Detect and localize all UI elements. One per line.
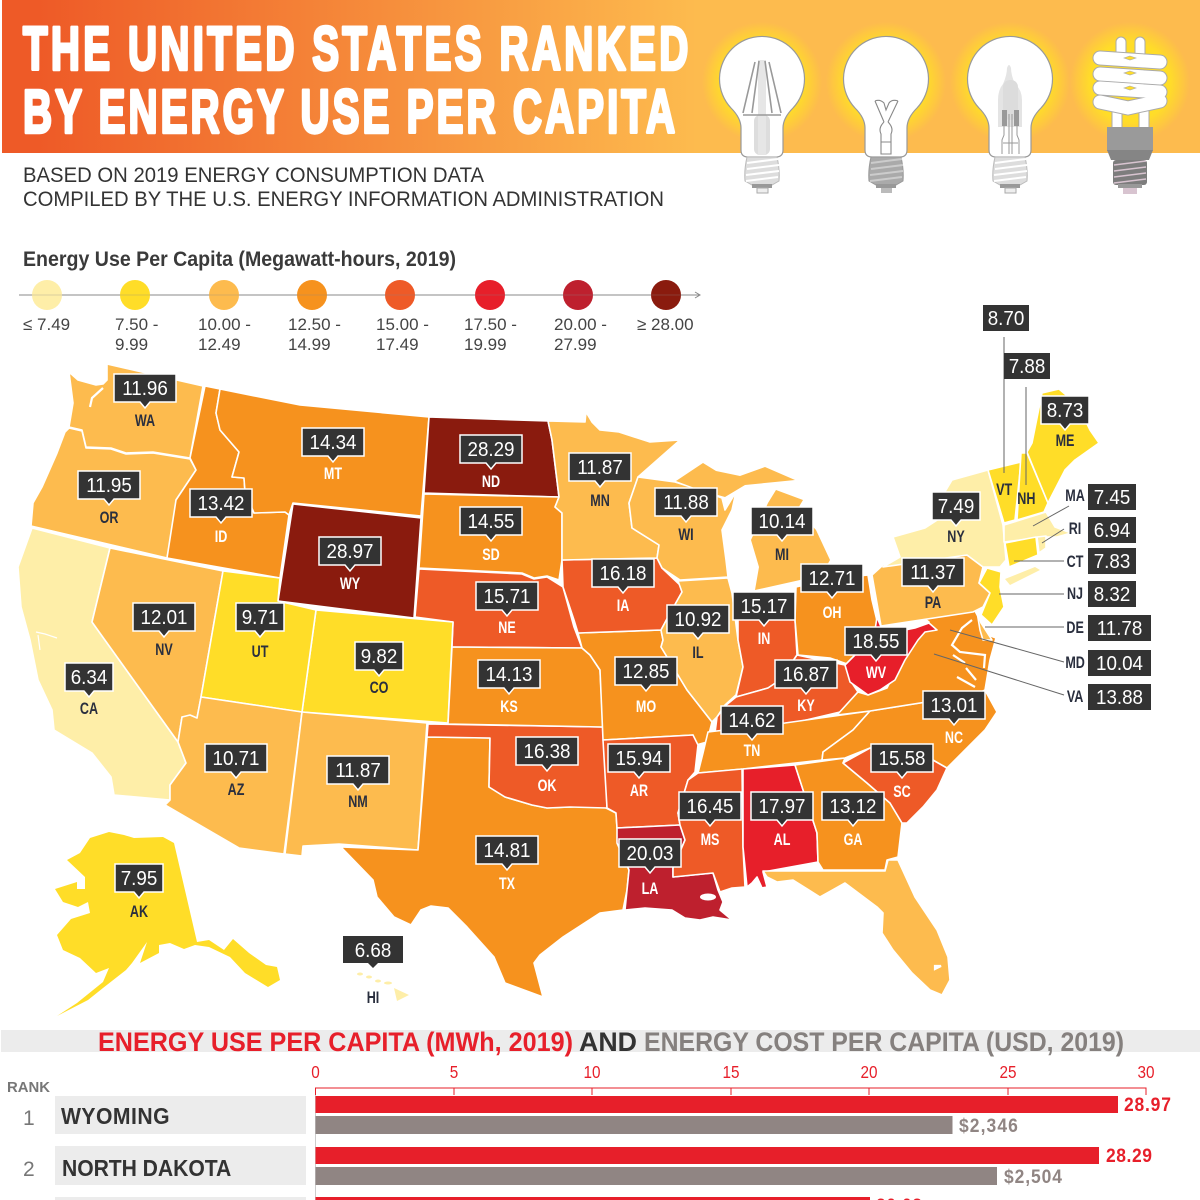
callout: IN (733, 592, 795, 649)
callout: NV (133, 603, 195, 660)
callout: HI: 6.68 (355, 939, 391, 962)
callout: CO (355, 642, 403, 698)
callout: VA: 13.88 (1096, 686, 1143, 709)
callout: AK: AK (130, 902, 148, 922)
San Francisco Bay (36, 632, 57, 650)
callout: KS: 14.13 (485, 663, 533, 686)
state: New Hampshire (1017, 453, 1048, 520)
chart heading band: ENERGY COST PER CAPITA (USD, 2019) (644, 1027, 1124, 1057)
label: VT: VT (996, 480, 1012, 500)
callout: NY: NY (947, 527, 965, 547)
callout: VA (1067, 684, 1151, 710)
legend: 20.00 - (554, 315, 607, 334)
callout: MS: 16.45 (686, 795, 734, 818)
callout: NJ (1067, 581, 1136, 607)
callout: ND (460, 435, 522, 492)
x axis: 30 (1137, 1062, 1155, 1082)
state: Alaska (55, 832, 280, 1016)
callout: HI: HI (367, 988, 379, 1008)
row: Wyoming: 28.97 (1124, 1093, 1171, 1115)
callout: ND: 28.29 (467, 438, 515, 461)
callout: AL: 17.97 (758, 795, 806, 818)
state: Nevada (92, 548, 223, 742)
callout: WV (845, 627, 907, 683)
callout: MA: 7.45 (1094, 486, 1130, 509)
state: New Mexico (285, 712, 427, 856)
subtitle: COMPILED BY THE U.S. ENERGY INFORMATION ADMINISTRATION (23, 187, 664, 211)
row: North Dakota: NORTH DAKOTA (62, 1155, 231, 1181)
callout: WI: WI (678, 525, 694, 545)
callout: RI: RI (1069, 519, 1081, 539)
callout: MD: MD (1065, 653, 1085, 673)
callout: NY: 7.49 (938, 495, 974, 518)
state: Washington (69, 364, 203, 458)
chart heading band (1, 1027, 1200, 1057)
state: Montana (216, 389, 429, 516)
state: North Carolina (822, 692, 997, 768)
callout: IA: IA (617, 596, 629, 616)
state: Illinois (661, 578, 743, 722)
callout: NH (1004, 353, 1050, 379)
x axis (311, 1062, 1155, 1200)
callout: CA: 6.34 (71, 666, 107, 689)
callout: ME (1041, 396, 1089, 451)
state: Oregon (31, 428, 196, 558)
callout: SD (460, 507, 522, 565)
callout: WA (114, 374, 176, 431)
state: Arizona (165, 697, 302, 854)
callout: WY: WY (340, 574, 360, 594)
callout: NJ: 8.32 (1094, 583, 1130, 606)
callout: PA: PA (925, 593, 941, 613)
row: Louisiana (cropped) (55, 1194, 922, 1200)
callout: WV: WV (866, 663, 886, 683)
state: Colorado (302, 610, 453, 723)
icon: LED filament bulb (720, 36, 804, 193)
callout: MD: 10.04 (1096, 652, 1143, 675)
callout: CA: CA (80, 699, 98, 719)
callout: IN: 15.17 (740, 595, 788, 618)
callout: KY: KY (797, 696, 815, 716)
callout: IA (592, 559, 654, 616)
callout: WI (655, 488, 717, 545)
legend: 27.99 (554, 335, 597, 354)
state: North Dakota (424, 417, 559, 497)
callout: DE: 11.78 (1097, 617, 1142, 640)
callout: WV: 18.55 (852, 630, 900, 653)
x axis: 10 (583, 1062, 601, 1082)
legend: 7.50 - (115, 315, 158, 334)
callout: IN: IN (758, 629, 770, 649)
callout: SD: SD (482, 545, 500, 565)
state: Utah (201, 571, 316, 712)
callout: UT: UT (252, 642, 268, 662)
callout: MA (1065, 484, 1136, 510)
callout: WA: WA (135, 411, 155, 431)
state: Indiana (736, 592, 797, 697)
callout: IL (667, 605, 729, 663)
row: Wyoming: WYOMING (61, 1103, 170, 1129)
title: THE UNITED STATES RANKED (23, 14, 688, 82)
callouts: state values (65, 305, 1151, 1008)
row: North Dakota (23, 1144, 1152, 1187)
callout: OH: 12.71 (808, 567, 856, 590)
callout: NC: NC (945, 728, 963, 748)
callout: LA (619, 839, 681, 899)
callout: KS (478, 660, 540, 717)
callout: NE: NE (498, 618, 516, 638)
callout: RI (1069, 517, 1136, 543)
callout: OK: 16.38 (523, 740, 571, 763)
callout: AL (751, 792, 813, 850)
callout: MO: 12.85 (622, 660, 670, 683)
row: North Dakota: $2,504 (1004, 1165, 1063, 1187)
callout: AL: AL (774, 830, 790, 850)
x axis: 20 (860, 1062, 878, 1082)
subtitle (23, 163, 664, 211)
bar chart (7, 1062, 1171, 1200)
callout: WA: 11.96 (122, 377, 168, 400)
label: NH: NH (1017, 489, 1035, 509)
callout: SC (871, 744, 933, 802)
state: Pennsylvania (872, 555, 990, 626)
state: Minnesota (548, 412, 680, 560)
callout: SC: 15.58 (878, 747, 926, 770)
callout: MN (569, 453, 631, 511)
callout: MS: MS (701, 830, 719, 850)
legend: 12.50 - (288, 315, 341, 334)
callout: CO: 9.82 (361, 645, 397, 668)
callout: NY (932, 492, 980, 547)
callout: CT: 7.83 (1094, 550, 1130, 573)
state: West Virginia (845, 617, 937, 695)
state: New York (883, 470, 1006, 567)
state: Nebraska (415, 569, 582, 648)
state: Wyoming (278, 504, 421, 618)
callout: CT (1067, 548, 1136, 574)
callout: ID (190, 489, 252, 547)
x axis: 25 (999, 1062, 1017, 1082)
callout: SC: SC (893, 782, 911, 802)
state: Tennessee (698, 711, 870, 773)
state: Rhode Island (1037, 536, 1046, 553)
state: Georgia (795, 758, 902, 870)
callout: UT: 9.71 (242, 606, 278, 629)
legend: ≤ 7.49 (23, 315, 70, 334)
callout: NE: 15.71 (483, 585, 531, 608)
callout: MI: MI (775, 545, 789, 565)
callout: NE (476, 582, 538, 638)
callout: TX: 14.81 (483, 839, 531, 862)
icon: halogen bulb (968, 36, 1052, 193)
callout: MT (302, 428, 364, 484)
callout: GA: GA (844, 830, 863, 850)
x axis: 0 (311, 1062, 320, 1082)
callout: SD: 14.55 (467, 510, 515, 533)
callout: HI (343, 936, 403, 1008)
callout: MI: 10.14 (758, 510, 806, 533)
state: Idaho (167, 386, 289, 578)
state: Kentucky (715, 655, 858, 733)
state: New Jersey (979, 568, 1004, 625)
callout: PA (902, 558, 964, 613)
callout: WY (319, 537, 381, 594)
icon: compact fluorescent bulb (1100, 42, 1160, 194)
callout: IL: 10.92 (674, 608, 722, 631)
callout: VT: 8.70 (988, 307, 1024, 330)
state: Mississippi (673, 769, 745, 892)
icon: incandescent bulb (844, 36, 928, 193)
state: Michigan lower peninsula (751, 490, 830, 590)
row: North Dakota: 2 (23, 1158, 35, 1181)
legend: 10.00 - (198, 315, 251, 334)
callout: OK: OK (538, 776, 557, 796)
state: Iowa (562, 558, 682, 633)
callout: ID: ID (215, 527, 227, 547)
legend heading: Energy Use Per Capita (Megawatt-hours, 2019) (23, 248, 456, 271)
callout: UT (236, 603, 284, 662)
state: Oklahoma (427, 724, 607, 808)
callout: KS: KS (500, 697, 518, 717)
callout: NM: 11.87 (335, 759, 381, 782)
callout: MA: MA (1065, 486, 1085, 506)
callout: AZ: AZ (228, 780, 244, 800)
state: Vermont (988, 462, 1021, 523)
callout: VA: VA (1067, 687, 1084, 707)
callout: NC: 13.01 (930, 694, 978, 717)
legend: ≥ 28.00 (637, 315, 694, 334)
callout: AZ (205, 744, 267, 800)
callout: OH: OH (823, 603, 841, 623)
callout: TX: TX (499, 874, 515, 894)
callout: AK: 7.95 (121, 867, 157, 890)
x axis: 5 (450, 1062, 458, 1082)
state: Alabama (743, 765, 818, 888)
subtitle: BASED ON 2019 ENERGY CONSUMPTION DATA (23, 163, 485, 187)
x axis: 15 (722, 1062, 740, 1082)
callout: IL: IL (692, 643, 704, 663)
callout: DE (1066, 615, 1151, 641)
callout: NV: NV (155, 640, 173, 660)
callout: MN: MN (590, 491, 610, 511)
callout: CA (65, 663, 113, 719)
legend: 17.49 (376, 335, 419, 354)
callout: RI: 6.94 (1094, 519, 1130, 542)
state: South Carolina (843, 745, 947, 823)
state: Wisconsin (629, 477, 736, 580)
callout: OR: 11.95 (86, 474, 132, 497)
state: Texas (341, 737, 629, 997)
Puget Sound and Florida lake details (90, 388, 941, 969)
Chesapeake Bay (952, 620, 985, 687)
callout: OH (801, 564, 863, 623)
callout: AZ: 10.71 (212, 747, 260, 770)
callout: ME: 8.73 (1047, 399, 1083, 422)
callout: MT: 14.34 (309, 431, 357, 454)
state: Kansas (448, 647, 603, 727)
callout: ID: 13.42 (197, 492, 245, 515)
callout: TN (721, 706, 783, 761)
state: Maine (1027, 389, 1099, 503)
chart heading band: ENERGY USE PER CAPITA (MWh, 2019) (98, 1027, 573, 1057)
legend: 17.50 - (464, 315, 517, 334)
callout: MI (751, 507, 813, 565)
callout: LA: 20.03 (626, 842, 674, 865)
row: North Dakota: 28.29 (1106, 1144, 1152, 1166)
callout: NJ: NJ (1067, 584, 1083, 604)
callout: OK (516, 737, 578, 796)
state: Ohio (795, 575, 878, 665)
callout: WY: 28.97 (326, 540, 374, 563)
callout: NM (327, 756, 389, 812)
callout: NM: NM (348, 792, 368, 812)
row: Wyoming (23, 1093, 1171, 1136)
callout: NH: 7.88 (1009, 355, 1045, 378)
callout: IA: 16.18 (599, 562, 647, 585)
callout: TN: 14.62 (728, 709, 776, 732)
state: California (18, 528, 186, 800)
callout: OR: OR (100, 508, 119, 528)
callout: MT: MT (324, 464, 342, 484)
chart heading band: AND (579, 1027, 637, 1057)
row: Wyoming: $2,346 (959, 1114, 1018, 1136)
state: Long Island (1005, 567, 1040, 585)
callout: CO: CO (370, 678, 388, 698)
state: Florida (763, 860, 950, 995)
state: Connecticut (1005, 537, 1038, 567)
legend: 14.99 (288, 335, 331, 354)
state: Delaware (977, 612, 992, 640)
callout: VT (983, 305, 1029, 331)
title: BY ENERGY USE PER CAPITA (23, 77, 675, 145)
callout: DE: DE (1066, 618, 1084, 638)
rank header: RANK (7, 1079, 50, 1096)
legend: 12.49 (198, 335, 241, 354)
legend: 9.99 (115, 335, 148, 354)
callout: NV: 12.01 (140, 606, 188, 629)
row: Wyoming: 1 (23, 1107, 35, 1130)
Lake Pontchartrain (700, 894, 716, 900)
callout: MD (1065, 650, 1151, 676)
callout: LA: LA (642, 879, 659, 899)
callout: ME: ME (1056, 431, 1074, 451)
callout: MO: MO (636, 697, 656, 717)
title (23, 14, 688, 145)
callout: PA: 11.37 (910, 561, 956, 584)
callout: TN: TN (744, 741, 760, 761)
callout: GA (822, 792, 884, 850)
callout: ND: ND (482, 472, 500, 492)
callout: MO (615, 657, 677, 717)
icon: light bulbs (702, 22, 1190, 194)
state: Louisiana (617, 825, 732, 920)
callout: AR: AR (630, 781, 648, 801)
state: Virginia and Maryland (837, 611, 996, 715)
callout: AK (115, 864, 163, 922)
leader lines (934, 337, 1069, 695)
callout: MN: 11.87 (577, 456, 623, 479)
callout: KY: 16.87 (782, 663, 830, 686)
header banner (2, 0, 1200, 153)
callout: WI: 11.88 (663, 491, 709, 514)
callout: AR: 15.94 (615, 747, 663, 770)
state: Michigan upper peninsula (676, 463, 795, 497)
callout: OR (78, 471, 140, 528)
callout: NC (923, 691, 985, 748)
callout: MS (679, 792, 741, 850)
callout: CT: CT (1067, 552, 1083, 572)
choropleth map of states (18, 364, 1099, 1016)
state: South Dakota (419, 494, 562, 580)
state: Hawaii (357, 972, 409, 1001)
legend: 19.99 (464, 335, 507, 354)
callout: GA: 13.12 (829, 795, 877, 818)
legend (19, 248, 700, 354)
state: Massachusetts (1004, 512, 1071, 542)
state: Arkansas (603, 735, 698, 828)
callout: AR (608, 744, 670, 801)
callout: TX (476, 836, 538, 894)
callout: KY (775, 660, 837, 716)
legend: 15.00 - (376, 315, 429, 334)
state: Missouri (578, 630, 712, 745)
